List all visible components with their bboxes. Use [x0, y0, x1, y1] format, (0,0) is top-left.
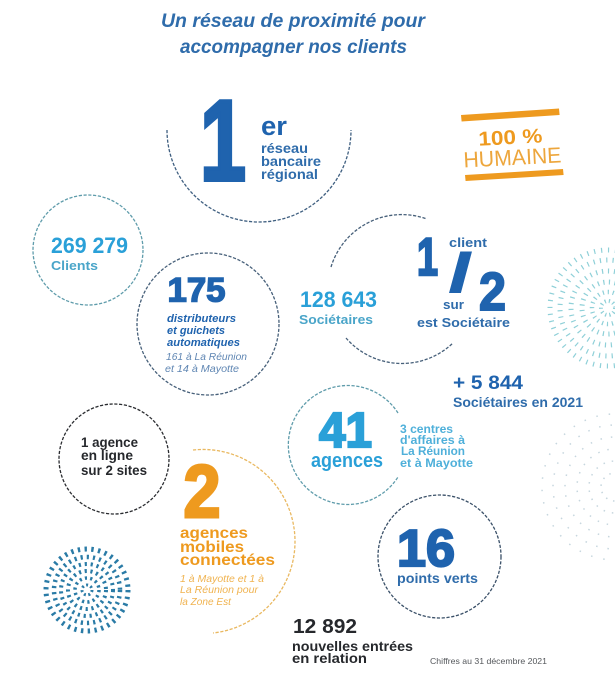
panel: 12 892 nouvelles entrées — [292, 616, 413, 666]
panel: 41 agences: La Réunion — [401, 446, 465, 458]
panel: 1er réseau bancaire régional: bancaire — [261, 153, 321, 169]
panel: 41 agences — [288, 386, 473, 504]
panel: 175 distributeurs: 175 — [168, 272, 226, 310]
panel: 175 distributeurs — [137, 253, 279, 395]
panel: 1 agence en ligne: sur 2 sites — [81, 463, 147, 478]
panel: 16 points verts: points verts — [397, 570, 478, 586]
panel: 12 892 nouvelles entrées: 12 892 — [293, 616, 357, 638]
panel: 16 points verts — [378, 495, 501, 618]
panel: 2 agences mobiles connectées: mobiles — [180, 539, 244, 556]
panel: 269 279 clients: 269 279 — [51, 233, 128, 258]
panel: 1 client sur 2 est sociétaire: sur — [443, 297, 464, 312]
callout: 100 % humaine: HUMAINE — [463, 142, 562, 173]
panel: 41 agences: et à Mayotte — [400, 458, 473, 470]
title — [161, 11, 427, 58]
panel: 1er réseau bancaire régional: régional — [261, 166, 318, 182]
panel: 128 643 sociétaires: 128 643 — [300, 287, 377, 312]
icon: dark blue dashed spiral — [46, 549, 128, 631]
panel: + 5 844 sociétaires en 2021: Sociétaires en 2021 — [453, 395, 583, 410]
title: accompagner nos clients — [180, 37, 407, 58]
panel: 2 agences mobiles connectées: 2 — [184, 450, 220, 533]
panel: 175 distributeurs: et 14 à Mayotte — [165, 363, 239, 375]
panel: 1 agence en ligne: 1 agence — [81, 435, 138, 450]
panel: 128 643 sociétaires: Sociétaires — [299, 312, 373, 327]
panel: + 5 844 sociétaires en 2021 — [453, 373, 583, 410]
panel: 41 agences: d'affaires à — [400, 435, 466, 447]
title: Un réseau de proximité pour — [161, 11, 427, 32]
panel: 1 client sur 2 est sociétaire: est Sociétaire — [417, 315, 510, 330]
panel: 41 agences: 3 centres — [400, 424, 453, 436]
panel: 269 279 clients — [33, 195, 143, 305]
icon: dotted spiral — [542, 414, 615, 560]
footnote: Chiffres au 31 décembre 2021 — [430, 656, 547, 666]
panel: 1 client sur 2 est sociétaire: client — [449, 235, 488, 250]
panel: 41 agences: agences — [311, 450, 383, 472]
panel: 269 279 clients: Clients — [51, 258, 98, 273]
panel: 2 agences mobiles connectées: la Zone Est — [180, 596, 232, 608]
panel: 1 client sur 2 est sociétaire: 1 — [417, 228, 438, 287]
panel: 1 client sur 2 est sociétaire: 2 — [479, 262, 506, 322]
panel: 12 892 nouvelles entrées: en relation — [292, 650, 367, 666]
panel: 41 agences: 41 — [319, 404, 372, 458]
panel: 16 points verts: 16 — [397, 520, 455, 578]
panel: 175 distributeurs: automatiques — [167, 337, 240, 349]
panel: 2 agences mobiles connectées: connectées — [180, 552, 275, 569]
panel: 1er réseau bancaire régional — [167, 78, 351, 222]
panel: 175 distributeurs: et guichets — [167, 325, 225, 337]
callout: 100 % humaine — [461, 108, 564, 181]
panel: 175 distributeurs: distributeurs — [167, 313, 236, 325]
panel: 128 643 sociétaires — [299, 215, 453, 363]
panel: 1 agence en ligne — [59, 404, 169, 514]
panel: 1er réseau bancaire régional: er — [261, 111, 287, 141]
callout: 100 % humaine: 100 % — [478, 125, 543, 151]
panel: 2 agences mobiles connectées: 1 à Mayotte et 1 à — [180, 573, 264, 585]
panel: 1 client sur 2 est sociétaire: / — [450, 244, 471, 303]
panel: 1 client sur 2 est sociétaire — [417, 228, 510, 330]
panel: 1 agence en ligne: en ligne — [81, 448, 133, 463]
icon: light teal dashed spiral — [550, 250, 615, 366]
panel: 12 892 nouvelles entrées: nouvelles entrées — [292, 638, 413, 654]
panel: 2 agences mobiles connectées: La Réunion pour — [180, 584, 258, 596]
panel: 2 agences mobiles connectées: agences — [180, 525, 248, 542]
panel: + 5 844 sociétaires en 2021: + 5 844 — [453, 373, 523, 394]
panel: 175 distributeurs: 161 à La Réunion — [166, 351, 247, 363]
panel: 1er réseau bancaire régional: 1 — [200, 78, 246, 205]
panel: 2 agences mobiles connectées — [180, 449, 295, 633]
panel: 1er réseau bancaire régional: réseau — [261, 140, 308, 156]
